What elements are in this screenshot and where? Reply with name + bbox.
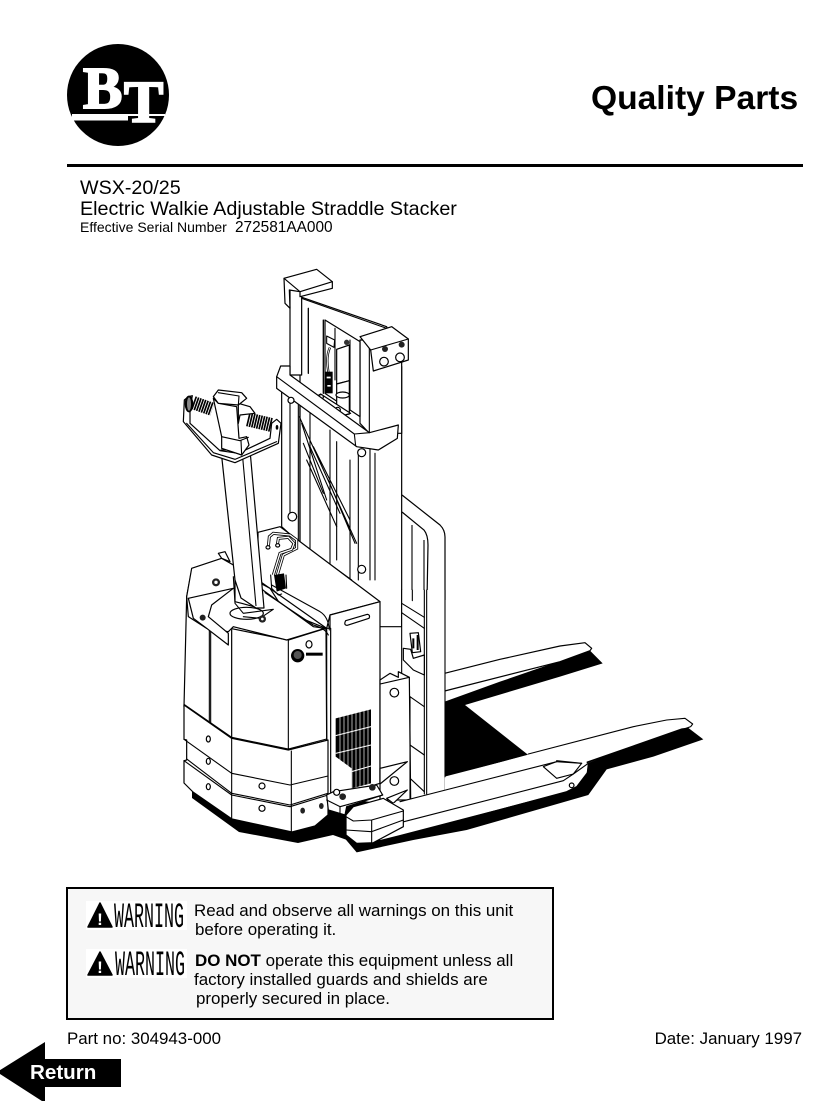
lower mast and backrest upright [402, 590, 445, 800]
warning text 2 [194, 951, 513, 1008]
side bracket [380, 672, 411, 803]
cooling vents [336, 709, 371, 788]
header rule [67, 164, 803, 167]
illustration: walkie straddle stacker [183, 269, 703, 852]
warning label 2 [86, 946, 187, 986]
hose and connector [266, 533, 297, 595]
body shadow [192, 783, 420, 852]
warning panel [67, 888, 553, 1019]
warning panel: WARNING [114, 898, 184, 938]
logo: BT circle [67, 44, 169, 146]
tiller arm [221, 450, 264, 608]
latch block [403, 648, 424, 675]
subtitle block [80, 177, 457, 236]
bumper bolts [206, 736, 324, 814]
part number: Part no: 304943-000 [67, 1029, 221, 1048]
warning text 1 [194, 901, 513, 939]
top left cap [284, 269, 332, 308]
logo: BT circle: T [124, 69, 163, 135]
subtitle block: Effective Serial Number [80, 219, 227, 235]
recess [188, 588, 233, 645]
hood top and tiller base [187, 552, 329, 645]
warning text 2: factory installed guards and shields are [194, 970, 488, 989]
mast [277, 269, 408, 627]
chains [299, 417, 357, 543]
bumpers [184, 705, 328, 832]
warning panel: WARNING [115, 946, 185, 986]
warning label 1: ! [97, 910, 103, 929]
base plate [327, 784, 383, 815]
return arrow [0, 1042, 121, 1101]
badge [291, 641, 323, 662]
crossbar [277, 366, 398, 450]
warning text 2: properly secured in place. [196, 989, 390, 1008]
warning text 1: Read and observe all warnings on this unit [194, 901, 513, 920]
side panels [184, 562, 327, 753]
warning label 1 [86, 898, 187, 938]
right cap [360, 327, 408, 371]
yoke [183, 396, 281, 463]
mast bolts [288, 397, 294, 403]
return arrow: Return [30, 1061, 96, 1084]
load backrest [402, 495, 445, 610]
logo: BT circle: B [83, 55, 122, 121]
warning text 2: DO NOT operate this equipment unless all [195, 951, 513, 970]
electrical compartment [258, 527, 380, 798]
subtitle block: Electric Walkie Adjustable Straddle Stacker [80, 198, 457, 220]
control head [213, 390, 255, 455]
date: Date: January 1997 [655, 1029, 802, 1048]
subtitle block: 272581AA000 [235, 219, 333, 236]
subtitle block: WSX-20/25 [80, 177, 181, 199]
fork shadows [343, 651, 703, 852]
back fork [445, 643, 592, 691]
handle assembly [183, 390, 281, 463]
front fork [380, 718, 693, 840]
grips [185, 396, 193, 412]
hydraulic cylinder [313, 320, 360, 417]
title: Quality Parts [591, 80, 798, 117]
handle slot [345, 614, 370, 625]
fork toe [346, 798, 403, 843]
warning label 2: ! [97, 958, 103, 977]
warning text 1: before operating it. [195, 920, 336, 939]
tractor body [184, 562, 403, 843]
